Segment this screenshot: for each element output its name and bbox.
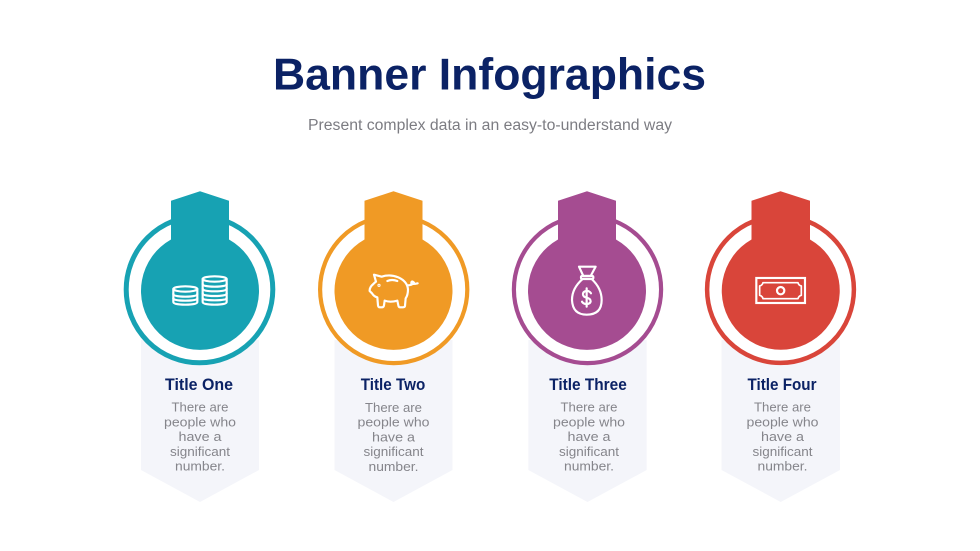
card body: significant: [170, 444, 230, 459]
text card: [141, 340, 259, 502]
title: Banner Infographics: [273, 50, 706, 100]
card body: have a: [372, 429, 416, 444]
text card: [722, 340, 840, 502]
card body: people who: [358, 415, 430, 430]
inner circle and banner tab: [722, 191, 840, 350]
card body: have a: [568, 429, 611, 444]
inner circle and banner tab: [335, 191, 453, 350]
card body: There are: [172, 400, 228, 414]
card body: have a: [761, 429, 805, 444]
outer ring: [320, 216, 467, 363]
card body: number.: [175, 458, 225, 474]
card body: number.: [564, 458, 614, 474]
card body: [164, 400, 236, 474]
card body: people who: [746, 414, 818, 429]
card body: number.: [368, 459, 418, 474]
card body: have a: [178, 429, 222, 444]
panel: title four: [707, 191, 854, 502]
card body: [553, 400, 625, 474]
icon: piggy bank: [370, 275, 418, 307]
card body: significant: [364, 444, 424, 459]
outer ring: [514, 216, 661, 363]
inner circle and banner tab: [528, 191, 646, 350]
card title: Title Four: [748, 376, 817, 394]
card body: There are: [754, 400, 811, 414]
card body: [746, 400, 818, 474]
card body: There are: [365, 400, 422, 415]
subtitle: Present complex data in an easy-to-understand way: [308, 117, 672, 134]
card body: people who: [164, 414, 236, 429]
card body: people who: [553, 414, 625, 429]
card body: significant: [559, 444, 619, 459]
panel: title three: [514, 191, 661, 502]
icon: money bag: [572, 267, 602, 315]
panel: title one: [126, 191, 273, 502]
icon: coins: [173, 276, 227, 305]
card title: Title Two: [361, 376, 425, 394]
card body: number.: [758, 458, 808, 474]
card title: Title One: [165, 376, 233, 394]
card title: Title Three: [549, 376, 627, 394]
card body: [358, 400, 430, 474]
text card: [528, 340, 647, 502]
inner circle and banner tab: [141, 191, 259, 350]
icon: banknote: [756, 278, 805, 303]
outer ring: [126, 216, 273, 363]
outer ring: [707, 216, 854, 363]
card body: significant: [752, 444, 813, 459]
panel: title two: [320, 191, 467, 502]
text card: [334, 340, 452, 502]
card body: There are: [560, 400, 618, 414]
